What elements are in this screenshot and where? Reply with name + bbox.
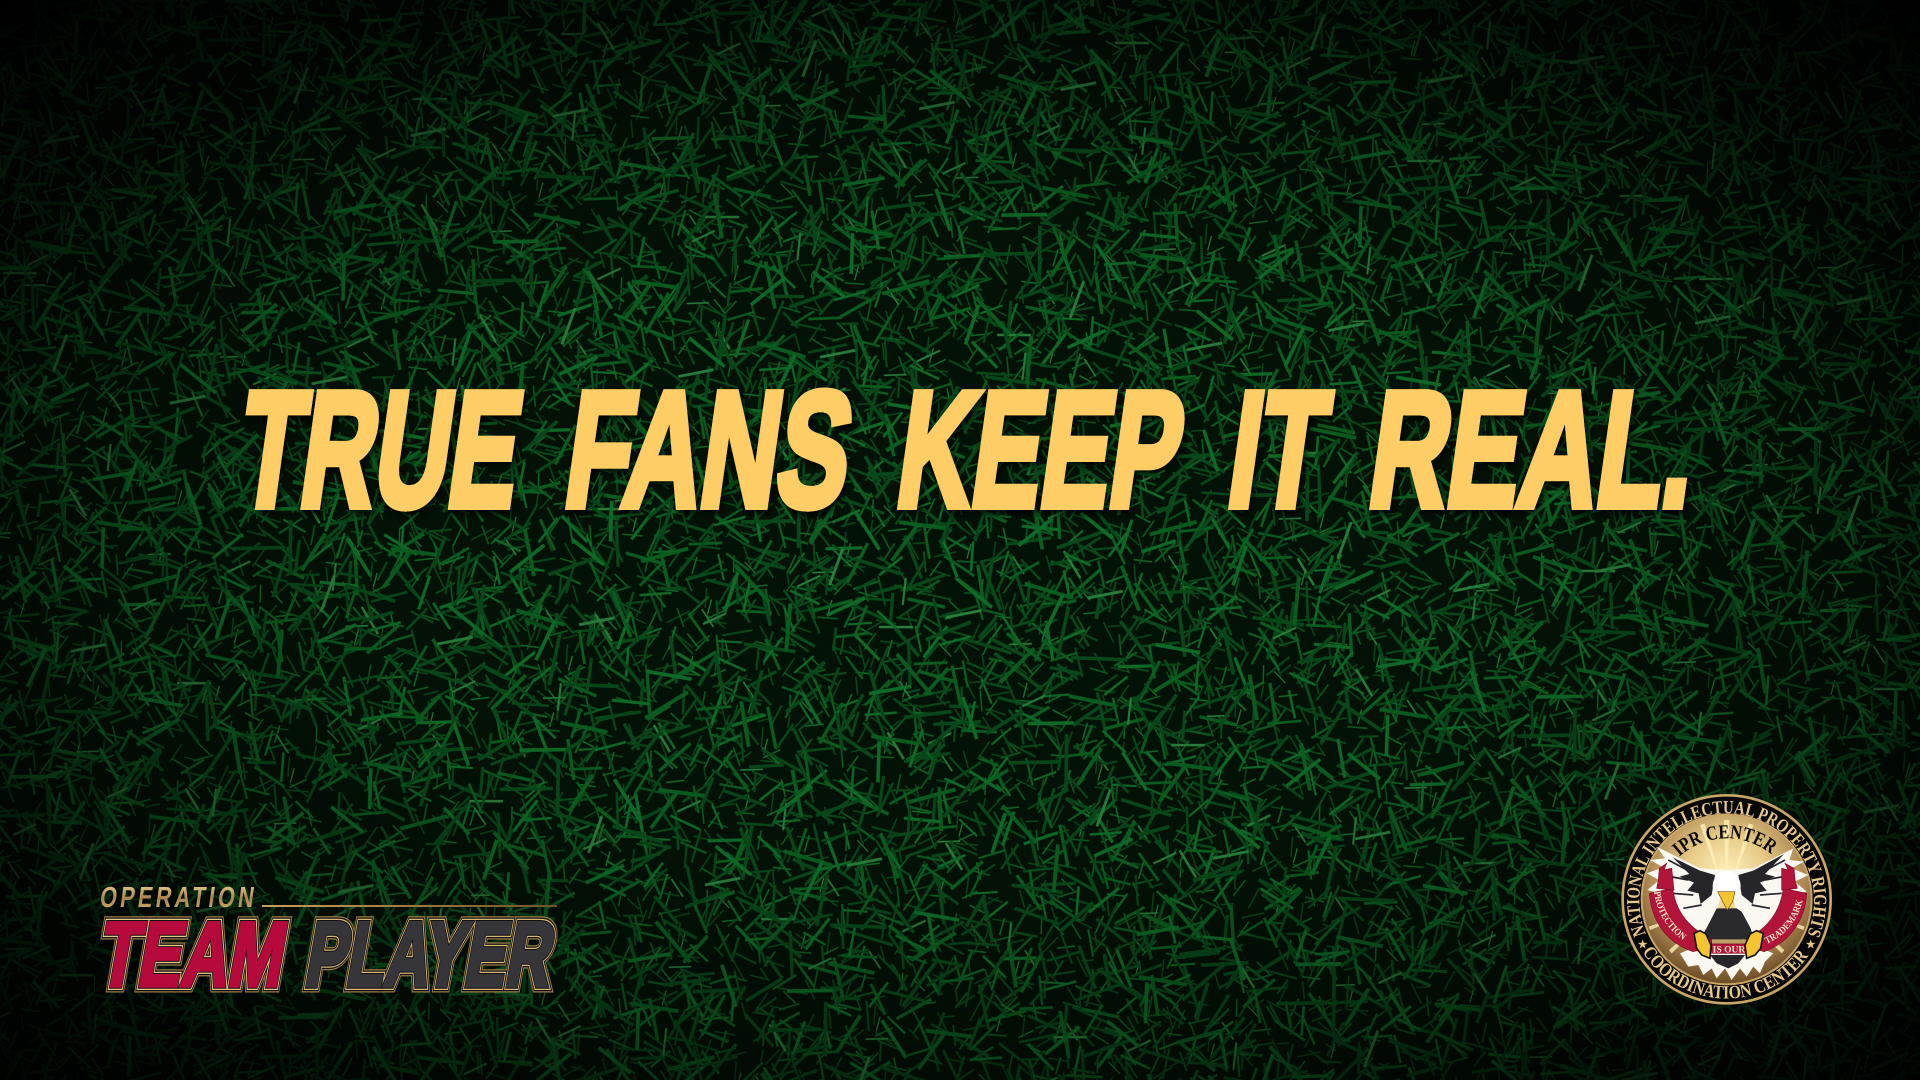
- headline: KEEP: [888, 358, 1195, 541]
- seal ring text: ★: [1805, 936, 1816, 951]
- eagle tail: [1680, 945, 1773, 980]
- logo word: PLAYER: PLAYER: [300, 903, 563, 1006]
- seal ring: [1621, 794, 1832, 1005]
- eagle talons: [1694, 931, 1763, 958]
- logo word: PLAYER: PLAYER: [300, 903, 563, 1006]
- logo rule: [262, 905, 557, 907]
- red banner: [1649, 862, 1807, 955]
- seal ring text: [1627, 800, 1826, 998]
- logo word: TEAM: TEAM: [93, 903, 295, 1006]
- eagle body: [1700, 908, 1754, 939]
- logo word: PLAYER: [300, 903, 563, 1006]
- seal: IPR Center: [1621, 794, 1832, 1005]
- logo label: OPERATION: OPERATION: [98, 882, 256, 914]
- seal ring text: ★: [1637, 936, 1648, 951]
- headline: REAL.: [1360, 358, 1709, 541]
- logo word: TEAM: TEAM: [93, 903, 295, 1006]
- seal ring text: NATIONAL INTELLECTUAL PROPERTY RIGHTS: [1627, 800, 1826, 938]
- eagle wing feathers: [1673, 854, 1784, 904]
- banner text: IS OUR: [1713, 944, 1746, 955]
- headline: FANS: [556, 358, 864, 541]
- logo word: PLAYER: PLAYER: [300, 903, 563, 1006]
- headline: IT: [1219, 358, 1339, 541]
- seal ring text: COORDINATION CENTER: [1644, 947, 1808, 998]
- sun rays: [1649, 820, 1805, 953]
- eagle beak: [1718, 892, 1735, 910]
- logo: Operation Team Player: [93, 882, 563, 1006]
- logo word: TEAM: TEAM: [93, 903, 295, 1006]
- logo word: TEAM: TEAM: [93, 903, 295, 1006]
- eagle: [1647, 847, 1808, 980]
- banner text: [1654, 890, 1803, 955]
- eagle head: [1713, 871, 1741, 901]
- logo word: PLAYER: PLAYER: [300, 903, 563, 1006]
- banner text: PROTECTION: [1654, 890, 1687, 940]
- seal title: IPR CENTER: IPR CENTER: [1671, 825, 1776, 856]
- banner text: TRADEMARK: [1764, 900, 1803, 944]
- eagle wings: [1647, 847, 1808, 940]
- logo word: TEAM: TEAM: [93, 903, 295, 1006]
- logo word: PLAYER: PLAYER: [300, 903, 563, 1006]
- headline: [229, 358, 1709, 541]
- headline: TRUE: [229, 358, 533, 541]
